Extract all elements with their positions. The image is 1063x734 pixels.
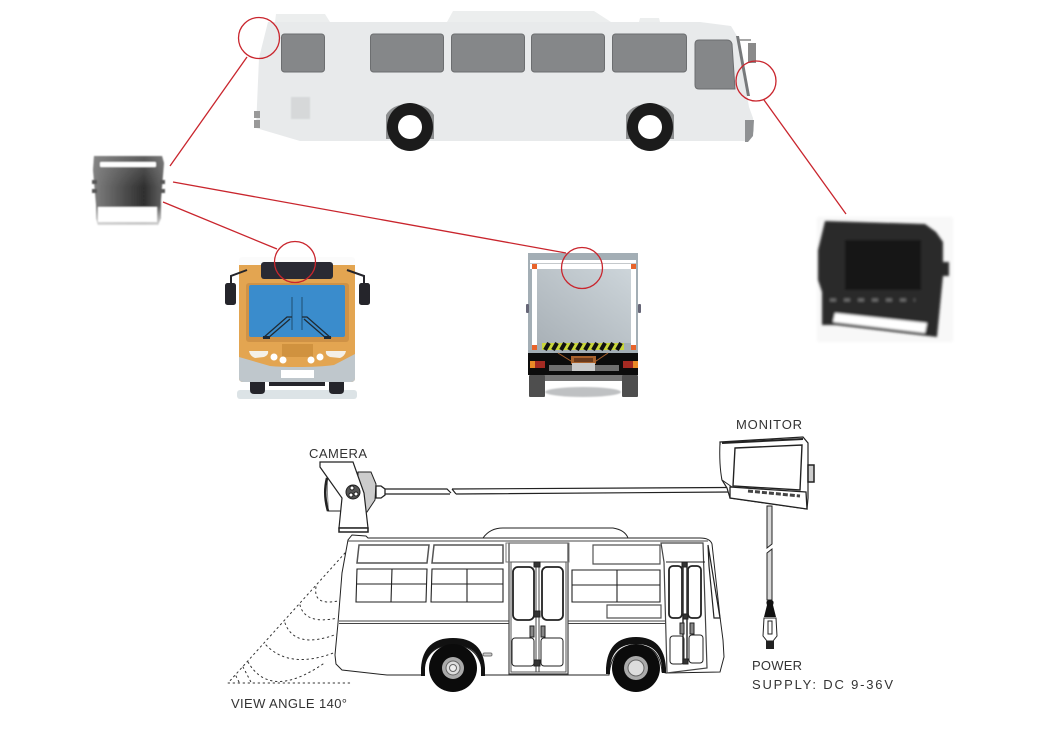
middle door [509,543,568,674]
line drawing city bus [335,528,724,692]
label: power supply: POWER [752,658,802,673]
side marker [483,653,492,656]
label: view angle: VIEW ANGLE 140° [231,696,347,711]
small rear camera photo [92,156,165,225]
front view orange bus [225,257,370,399]
windshield [708,545,720,618]
camera line drawing [320,462,385,532]
power cable and plug [763,506,777,649]
front wheel [606,637,666,692]
bus outline [335,535,724,675]
rear view truck [526,253,641,397]
camera to monitor cable [385,488,730,494]
front door [661,543,707,673]
view angle dotted cone [228,553,353,684]
label: camera: CAMERA [309,446,367,461]
belt line [339,621,668,624]
label: power supply [752,658,893,692]
label: monitor: MONITOR [736,417,802,432]
main windows [356,569,427,602]
monitor line drawing [720,437,814,509]
label: power supply: SUPPLY: DC 9-36V [752,677,893,692]
red callout lines and circles [163,18,846,288]
monitor photo [817,217,953,342]
rear wheel [421,638,485,692]
upper windows [357,545,429,563]
side view coach bus [254,11,756,151]
